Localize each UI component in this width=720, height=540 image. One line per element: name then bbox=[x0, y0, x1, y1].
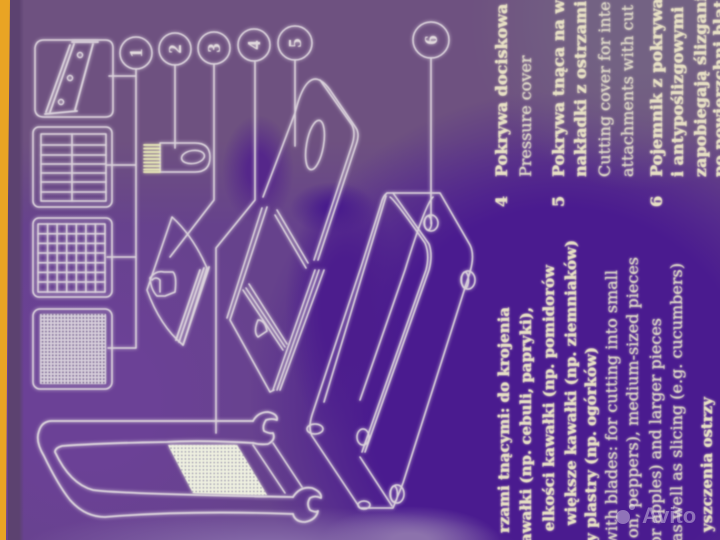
line art: exploded parts diagram bbox=[33, 22, 475, 522]
legend item 4: pressure cover: 4 bbox=[492, 196, 511, 207]
callout 3 bbox=[170, 32, 230, 257]
part 4: pressure cover bbox=[227, 207, 324, 392]
watermark: Avito bbox=[616, 503, 696, 528]
callout 4: 4 bbox=[244, 40, 264, 50]
legend item 5: cutting cover: Pokrywa tnąca na w bbox=[549, 0, 568, 177]
box edge: orange table strip and worn edge bbox=[0, 0, 24, 540]
legend item 5: cutting cover bbox=[549, 0, 637, 207]
callout 1: number circle and leader to attachments bbox=[107, 37, 152, 348]
text block: English description of blades: on, peppers), medium-sized pieces bbox=[623, 257, 642, 538]
text block: Polish description of blades, lower part: awałki (np. cebuli, papryki), bbox=[517, 307, 535, 540]
text block: Polish description of blades, lower part: większe kawałki (np. ziemniaków) bbox=[562, 240, 580, 526]
legend item 6: container: zapobiegają ślizgani bbox=[691, 0, 710, 177]
callout 4 bbox=[216, 29, 270, 433]
part 3: wedge pusher bbox=[147, 217, 209, 345]
legend item 5: cutting cover: nakładki z ostrzami bbox=[571, 1, 590, 177]
callout 5: 5 bbox=[285, 38, 305, 48]
callout 3: 3 bbox=[204, 44, 224, 52]
legend item 5: cutting cover: Cutting cover for inte bbox=[595, 1, 614, 177]
watermark: Avito: Avito bbox=[642, 503, 696, 528]
part 1: grater frame with fork ends bbox=[38, 412, 321, 522]
text: blade cleaning line: yszczenia ostrzy bbox=[698, 396, 716, 533]
part 2: cleaning brush bbox=[144, 143, 210, 172]
callout 2 bbox=[159, 33, 191, 148]
text block: English description of blades bbox=[602, 257, 686, 540]
part 6: container with non-slip feet bbox=[307, 193, 475, 509]
attachment: large pieces grid bbox=[33, 127, 112, 207]
callout 5 bbox=[278, 26, 312, 146]
text block: English description of blades: with blades: for cutting into small bbox=[602, 270, 621, 540]
callout 6: 6 bbox=[421, 36, 441, 44]
legend item 6: container bbox=[647, 0, 720, 207]
text block: English description of blades: as well as slicing (e.g. cucumbers) bbox=[667, 263, 686, 540]
attachment: small pieces fine grid bbox=[33, 309, 112, 389]
text block: Polish description of blades, lower part: rzami tnącymi: do krojenia bbox=[495, 307, 513, 533]
legend item 4: pressure cover: Pokrywa dociskowa bbox=[492, 4, 511, 177]
legend item 6: container: i antypoślizgowymi bbox=[668, 7, 687, 177]
legend item 6: container: Pojemnik z pokrywa bbox=[647, 0, 666, 177]
text block: Polish description of blades, lower part: y plastry (np. ogórków) bbox=[582, 347, 600, 540]
attachment: slicing blade bbox=[35, 40, 113, 117]
text block: English description of blades: or apples) and larger pieces bbox=[646, 318, 665, 540]
legend item 5: cutting cover: 5 bbox=[549, 196, 568, 207]
attachment: medium pieces grid bbox=[33, 218, 112, 297]
callout 2: 2 bbox=[165, 44, 185, 54]
text block: Polish description of blades, lower part: elkości kawałki (np. pomidorów bbox=[540, 264, 558, 531]
legend item 4: pressure cover bbox=[492, 4, 535, 207]
callout 6 bbox=[413, 22, 449, 224]
legend item 6: container: 6 bbox=[647, 196, 666, 207]
text block: Polish description of blades, lower part bbox=[495, 240, 600, 540]
part 5: cutting cover with thumb hole bbox=[263, 79, 358, 260]
legend item 4: pressure cover: Pressure cover bbox=[516, 55, 535, 177]
callout 1: number circle and leader to attachments: 1 bbox=[126, 48, 146, 58]
legend item 5: cutting cover: attachments with cut bbox=[618, 4, 637, 177]
